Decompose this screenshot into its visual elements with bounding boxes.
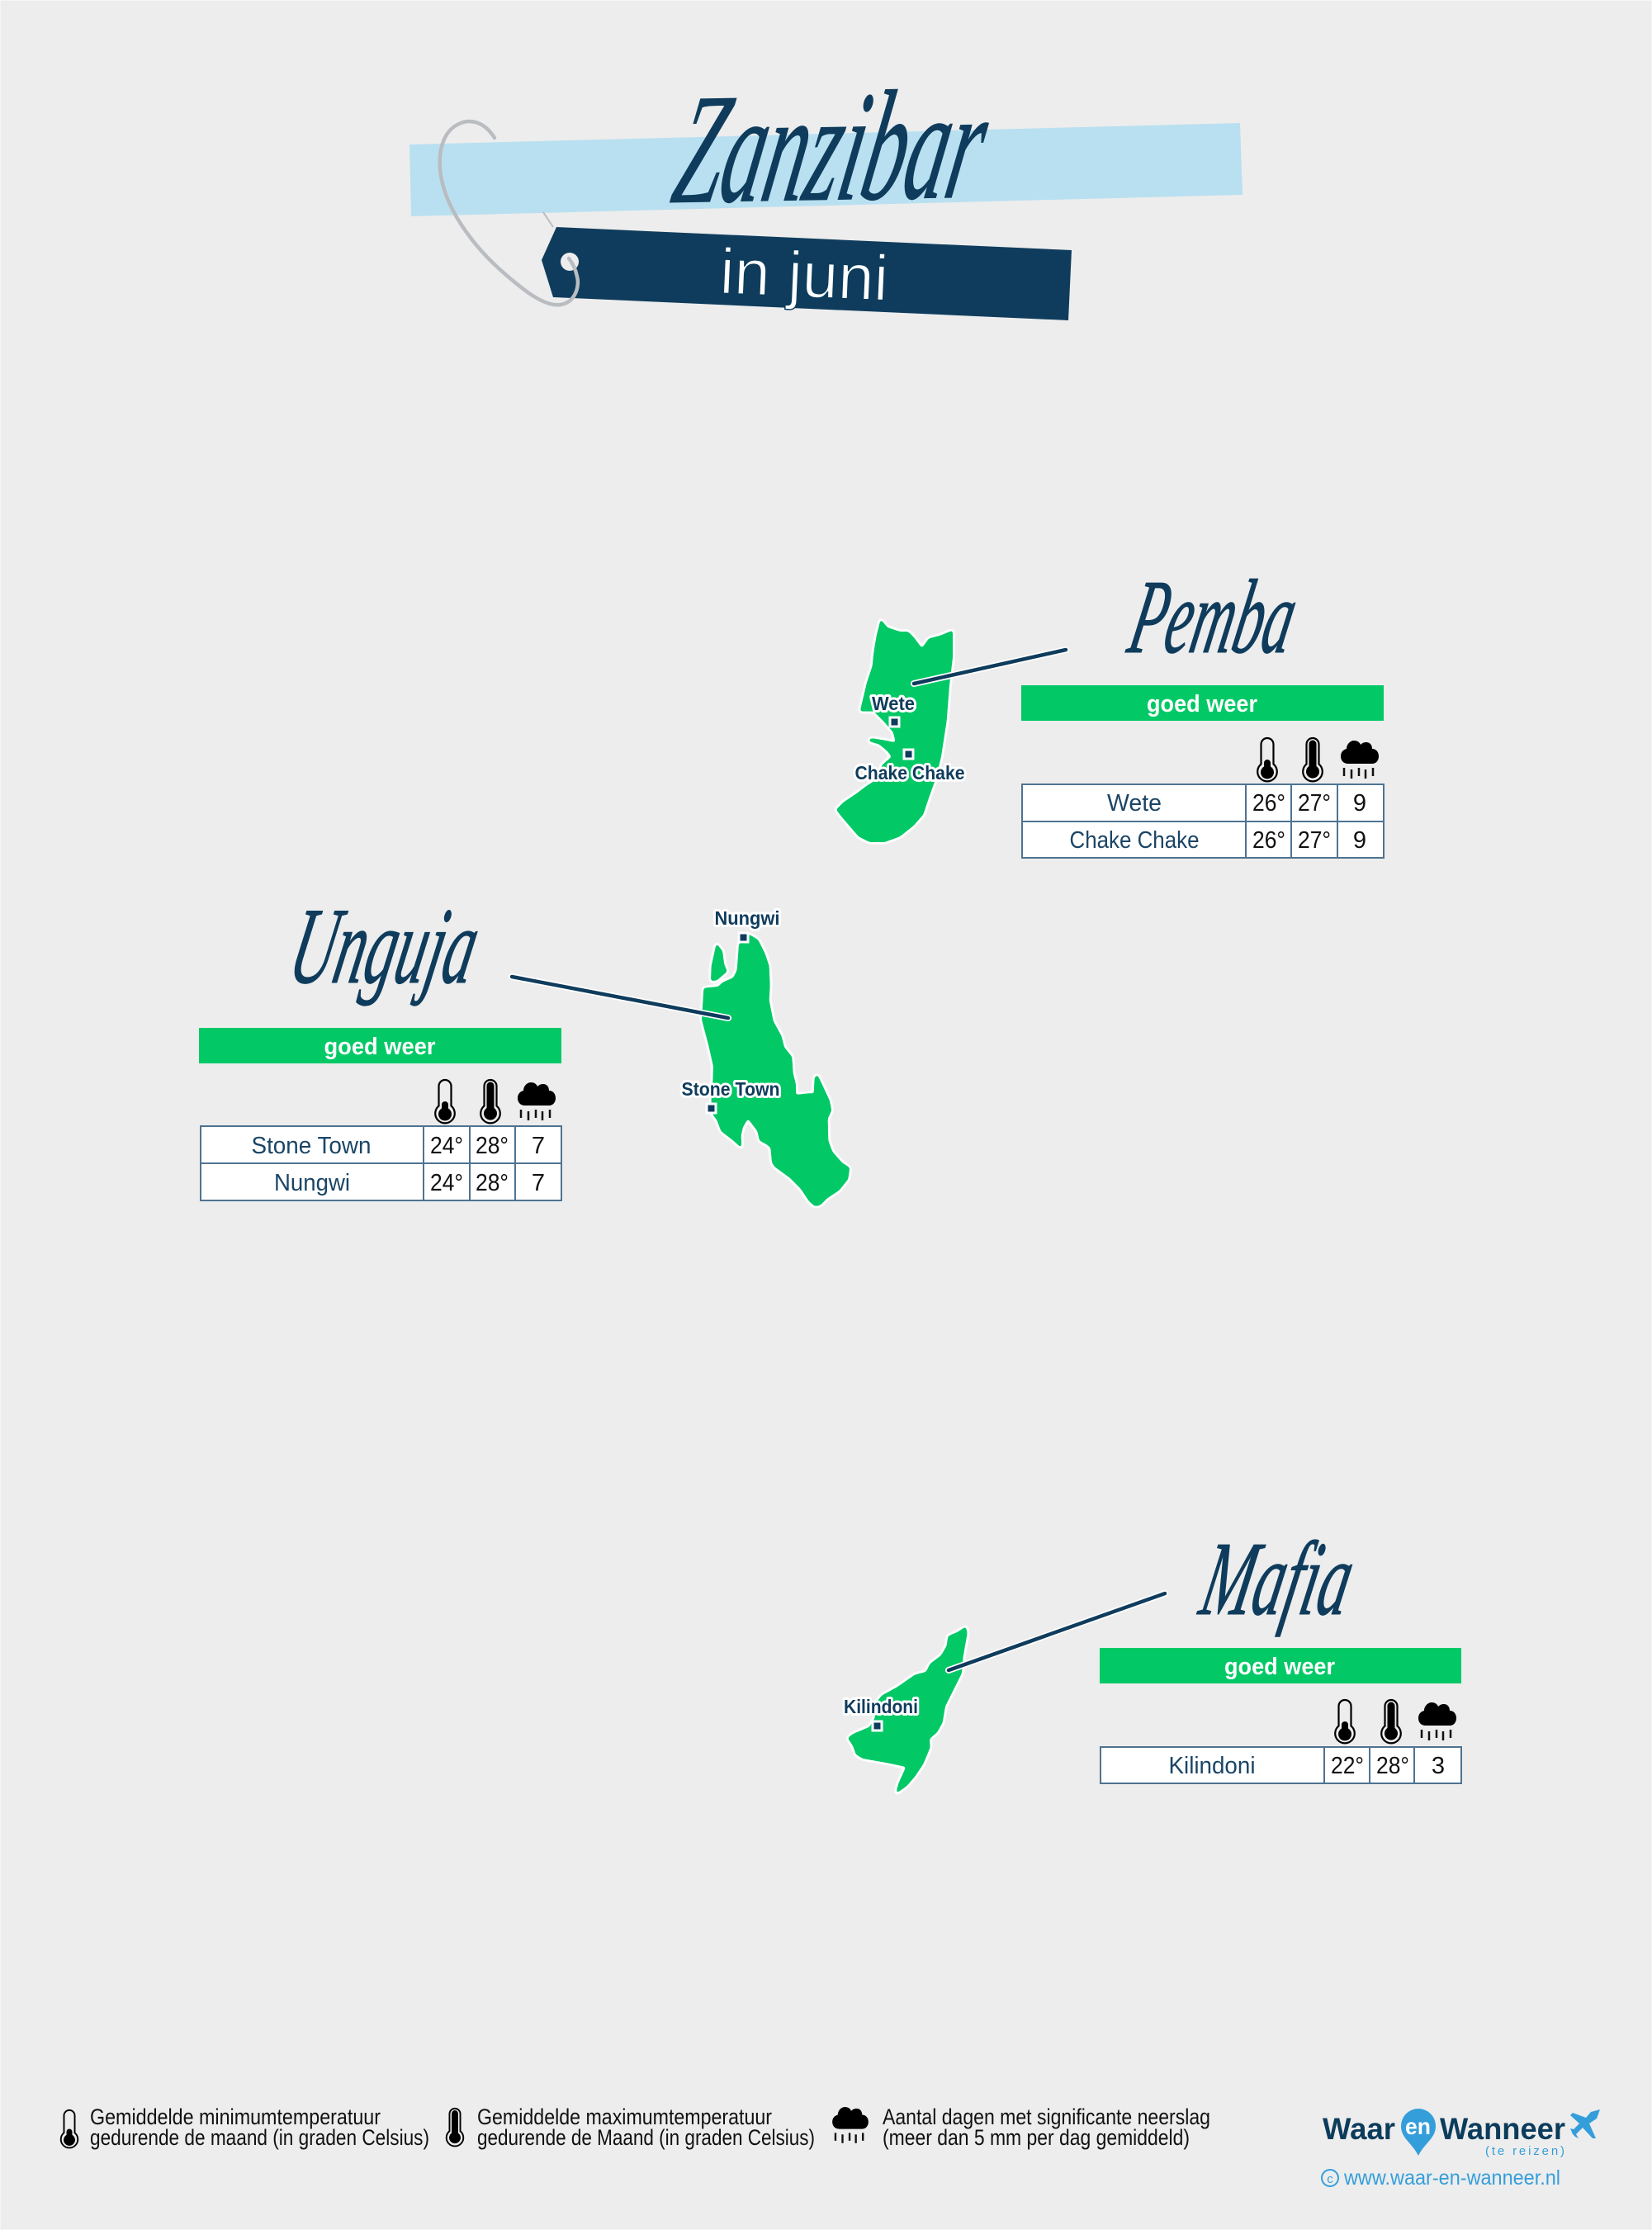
weather table: 22° <box>1331 1753 1364 1779</box>
icon: copyright <box>1322 2170 1338 2186</box>
icon: minimum temperature <box>1257 738 1277 781</box>
weather table: Stone Town <box>251 1133 372 1159</box>
legend <box>61 2105 1210 2150</box>
weather table: 28° <box>1376 1753 1409 1779</box>
icon: maximum temperature legend <box>447 2109 463 2146</box>
weather table: 27° <box>1298 827 1331 854</box>
icon: copyright: c <box>1327 2172 1333 2186</box>
city marker: Nungwi <box>715 907 779 942</box>
icon: map pin with en: en <box>1405 2114 1431 2139</box>
title banner: Zanzibar in juni <box>409 57 1243 320</box>
panel: Pemba <box>836 558 1384 858</box>
map: Unguja island <box>702 935 850 1206</box>
heading: Pemba: Pemba <box>1120 558 1307 675</box>
connector line <box>914 650 1066 684</box>
subtitle: in juni: in juni <box>718 234 890 315</box>
weather table <box>1022 784 1384 858</box>
weather table: 7 <box>532 1133 545 1159</box>
icon: rain legend <box>832 2107 869 2143</box>
dark blue luggage tag <box>542 227 1072 320</box>
logo word: Wanneer: Wanneer <box>1440 2112 1565 2146</box>
tag string <box>543 212 553 227</box>
city marker: Wete: Wete <box>872 693 915 714</box>
city marker: Stone Town <box>682 1078 779 1113</box>
legend text: minimum temperature: Gemiddelde minimumtemperatuur <box>90 2105 381 2129</box>
weather table: 24° <box>430 1133 463 1159</box>
weather table <box>201 1126 561 1200</box>
weather table: 9 <box>1353 790 1366 817</box>
city marker: Chake Chake <box>855 750 964 784</box>
weather table: 27° <box>1298 790 1331 817</box>
heading: Unguja: Unguja <box>281 885 490 1006</box>
weather table: 26° <box>1252 827 1285 854</box>
city marker: Stone Town: Stone Town <box>682 1078 779 1100</box>
weather table: 26° <box>1252 790 1285 817</box>
connector line <box>949 1593 1165 1670</box>
legend text: maximum temperature <box>477 2105 815 2150</box>
light blue band <box>409 123 1243 216</box>
logo: Waar en Wanneer <box>1322 2109 1600 2190</box>
weather table: 9 <box>1353 827 1366 854</box>
legend text: rain: (meer dan 5 mm per dag gemiddeld) <box>883 2125 1190 2150</box>
icon: minimum temperature legend <box>61 2110 78 2147</box>
legend text: rain: Aantal dagen met significante neerslag <box>883 2105 1210 2129</box>
icon: minimum temperature <box>1335 1700 1355 1743</box>
map: Mafia island <box>848 1626 968 1794</box>
weather table <box>1101 1747 1461 1783</box>
icon: airplane <box>1570 2109 1600 2138</box>
weather table: 7 <box>532 1170 545 1196</box>
weather table: Wete <box>1107 790 1162 817</box>
icon: maximum temperature <box>1381 1700 1401 1743</box>
title: Zanzibar: Zanzibar <box>662 57 1002 237</box>
panel: Mafia <box>844 1520 1461 1794</box>
weather bar <box>1100 1648 1461 1683</box>
city marker: Nungwi: Nungwi <box>715 907 779 929</box>
weather bar: goed weer <box>324 1034 436 1060</box>
weather table: 24° <box>430 1170 463 1196</box>
connector line <box>512 977 728 1018</box>
city marker: Kilindoni <box>844 1696 918 1730</box>
city marker: Wete <box>872 693 915 727</box>
logo tagline: (te reizen) <box>1485 2144 1564 2158</box>
city marker: Kilindoni: Kilindoni <box>844 1696 918 1717</box>
panel: Unguja <box>199 885 850 1206</box>
legend text: maximum temperature: gedurende de Maand (in graden Celsius) <box>477 2125 815 2150</box>
map: Pemba island <box>836 619 953 842</box>
icon: maximum temperature <box>480 1080 500 1123</box>
weather table: Nungwi <box>274 1170 350 1196</box>
weather bar <box>199 1028 561 1063</box>
weather table: 28° <box>476 1133 509 1159</box>
weather bar <box>1021 685 1384 721</box>
legend text: minimum temperature: gedurende de maand (in graden Celsius) <box>90 2125 429 2150</box>
tag hole <box>561 253 579 271</box>
icon: minimum temperature <box>435 1080 455 1123</box>
city marker: Chake Chake: Chake Chake <box>855 762 964 784</box>
icon: rain <box>1341 741 1379 779</box>
legend text: maximum temperature: Gemiddelde maximumtemperatuur <box>477 2105 772 2129</box>
weather bar: goed weer <box>1224 1654 1335 1680</box>
legend text: minimum temperature <box>90 2105 429 2150</box>
weather bar: goed weer <box>1147 691 1257 717</box>
weather table: Chake Chake <box>1070 827 1199 854</box>
grey tag ring <box>440 121 578 305</box>
icon: map pin with en <box>1401 2109 1436 2156</box>
weather table: 3 <box>1432 1753 1445 1779</box>
logo word: Waar: Waar <box>1323 2112 1395 2146</box>
icon: maximum temperature <box>1303 738 1323 781</box>
weather table: 28° <box>476 1170 509 1196</box>
icon: rain <box>518 1082 556 1120</box>
icon: rain <box>1418 1702 1456 1740</box>
legend text: rain <box>883 2105 1210 2150</box>
website url: www.waar-en-wanneer.nl <box>1343 2166 1560 2190</box>
heading: Mafia: Mafia <box>1191 1520 1364 1637</box>
weather table: Kilindoni <box>1169 1753 1255 1779</box>
